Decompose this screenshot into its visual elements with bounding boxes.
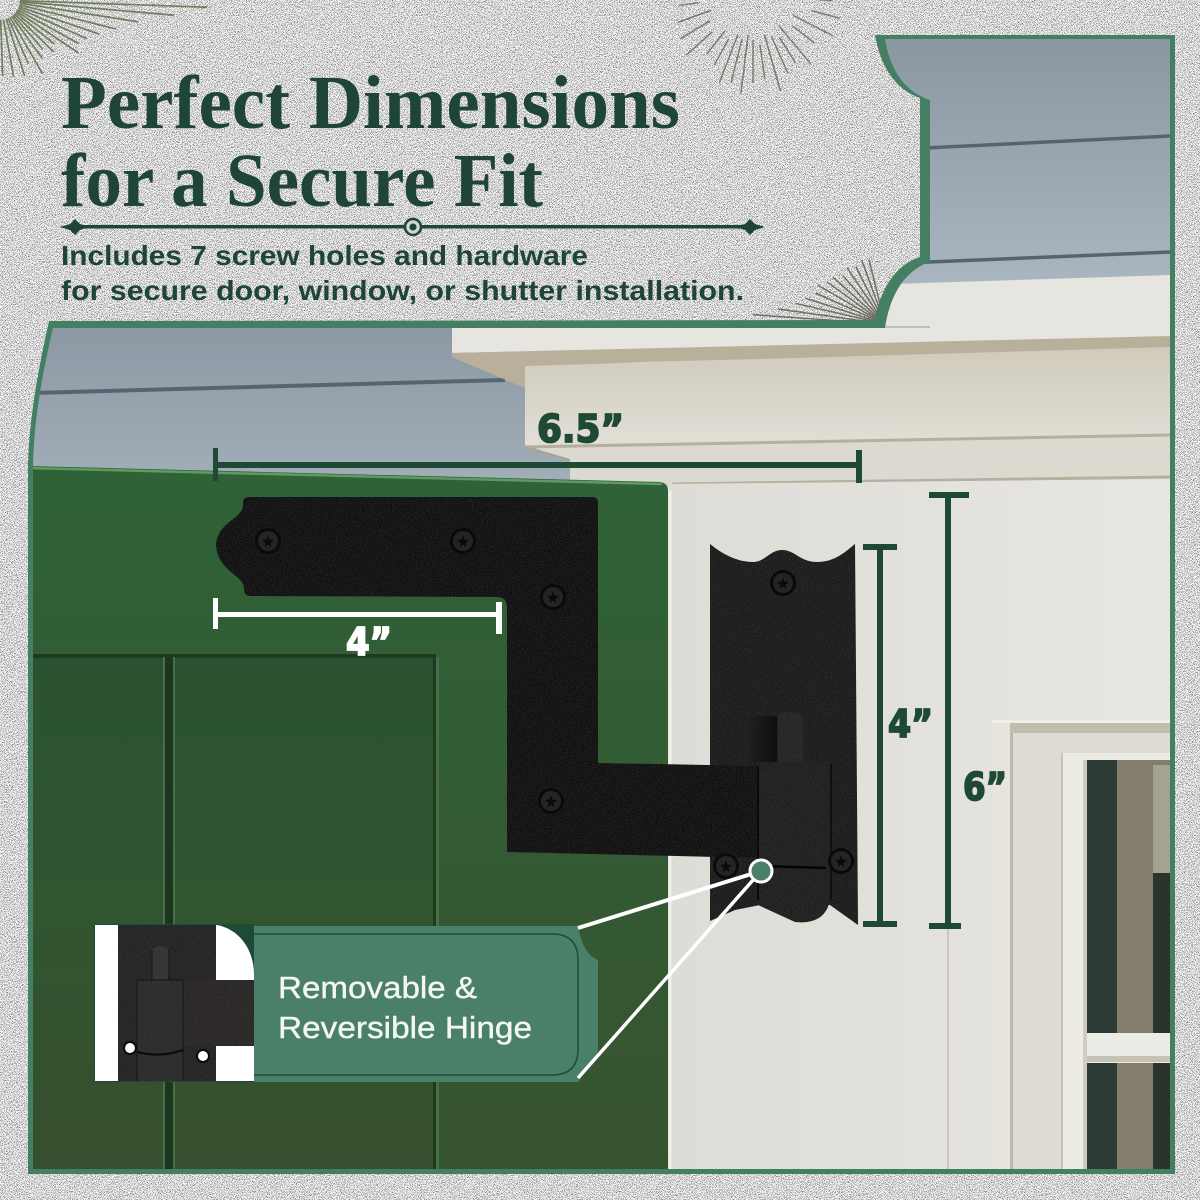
callout: removable hinge — [94, 924, 598, 1082]
main wall — [668, 479, 1170, 1170]
hinge shading — [745, 716, 831, 900]
siding upper right — [880, 39, 1175, 284]
title: for a Secure Fit — [61, 139, 543, 223]
ornamental rule — [60, 219, 765, 235]
dimension: 6 inch height: 6” — [963, 765, 1007, 809]
callout text line one: Removable & — [278, 970, 477, 1005]
dimension: 4 inch strap: 4” — [346, 620, 392, 664]
sunburst bottom right — [753, 260, 883, 323]
title — [61, 61, 680, 223]
hinge wall plate — [710, 544, 858, 925]
green shutter — [30, 466, 670, 1170]
white fascia — [452, 275, 1170, 353]
sunburst top center — [678, 0, 840, 94]
lower molding — [534, 447, 590, 480]
photo base fill — [604, 280, 1170, 490]
callout banner — [220, 926, 598, 1082]
subtitle: Includes 7 screw holes and hardware — [61, 240, 588, 271]
fascia shadow band — [452, 336, 1170, 388]
callout inset hinge closeup — [95, 925, 255, 1082]
subtitle — [61, 240, 744, 306]
title: Perfect Dimensions — [61, 61, 680, 145]
callout pointer lines and dot — [578, 860, 772, 1078]
siding lower left — [30, 328, 590, 488]
hinge — [216, 497, 858, 925]
hinge strap — [216, 497, 760, 858]
hinge screws — [255, 528, 854, 879]
dimension: 4 inch plate — [863, 544, 933, 927]
sunburst top left — [1, 1, 207, 77]
cream wall band — [525, 347, 1170, 447]
dimension: 4 inch strap — [213, 598, 502, 664]
hinge pin — [778, 712, 803, 764]
callout text line two: Reversible Hinge — [278, 1010, 532, 1045]
subtitle: for secure door, window, or shutter installation. — [61, 275, 744, 306]
hinge knuckle — [758, 762, 830, 922]
recessed panel — [33, 658, 433, 774]
callout inner outline — [240, 934, 578, 1075]
dimension: 6.5 inch width — [213, 407, 862, 483]
window — [992, 720, 1172, 1170]
callout inset outline — [94, 924, 254, 1082]
dimension: 6 inch height — [929, 492, 1007, 929]
dimension: 4 inch plate: 4” — [888, 702, 933, 746]
dimension: 6.5 inch width: 6.5” — [537, 407, 624, 451]
